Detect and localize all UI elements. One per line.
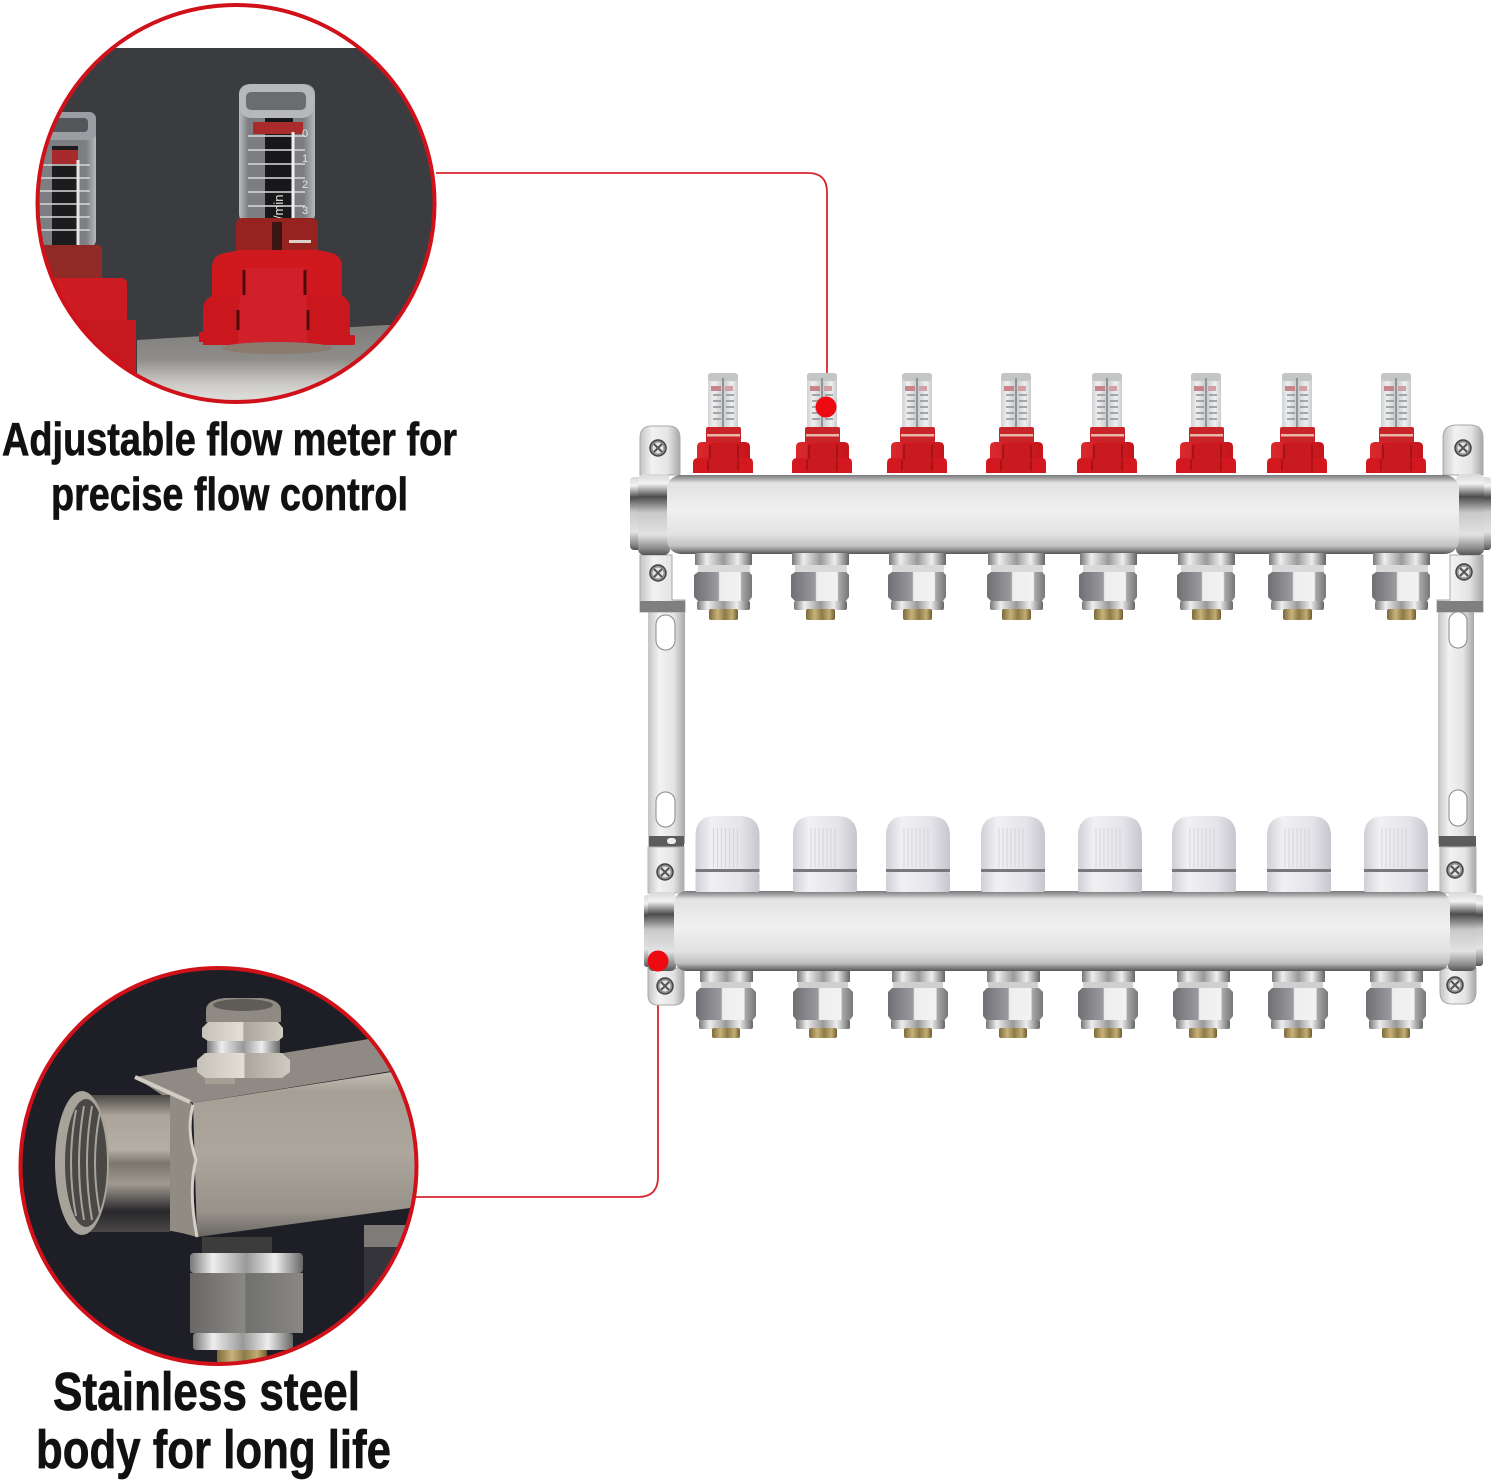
flow meter 7 — [1267, 373, 1327, 473]
flow meter 3 — [887, 373, 947, 473]
manifold body — [135, 1030, 417, 1237]
caption: stainless steel: Stainless steel — [53, 1362, 360, 1422]
flow scale numerals: 0 — [302, 128, 308, 140]
connector line: stainless body — [416, 965, 658, 1197]
top plug fitting — [197, 998, 290, 1084]
bottom right bracket — [1439, 836, 1476, 1004]
flow scale numerals: 1 — [302, 153, 308, 165]
second fitting (background) — [364, 1225, 406, 1297]
connector line: flow meter — [436, 173, 827, 405]
caption: flow meter: Adjustable flow meter for — [2, 413, 457, 465]
manifold product — [630, 373, 1491, 1038]
detail circle: stainless steel close-up — [15, 960, 425, 1370]
marker dot: stainless body — [648, 950, 668, 972]
right mounting strap — [1438, 612, 1474, 844]
bottom left bracket — [648, 835, 684, 1005]
caption: flow meter — [2, 413, 457, 520]
top right bracket — [1437, 425, 1483, 612]
threaded port — [55, 1091, 170, 1235]
upper outlet fittings row — [694, 553, 1430, 620]
flow meter 6 — [1176, 373, 1236, 473]
flow meter 4 — [986, 373, 1046, 473]
flow scale numerals: 2 — [302, 179, 308, 191]
flow meters row — [693, 373, 1426, 473]
bottom header bar — [644, 891, 1483, 971]
white valve caps row — [696, 816, 1428, 892]
flow meter 1 — [693, 373, 753, 473]
flow meter 2 — [792, 373, 852, 473]
left flow meter (partial) — [40, 112, 136, 372]
flow scale numerals: l/min — [271, 195, 286, 222]
top header bar — [630, 474, 1491, 555]
flow scale numerals — [274, 130, 308, 218]
lower outlet fittings row — [696, 971, 1426, 1038]
flow meter 5 — [1077, 373, 1137, 473]
flow meter 8 — [1366, 373, 1426, 473]
caption: stainless steel — [36, 1362, 391, 1480]
left mounting strap — [648, 612, 685, 844]
lower outlet fitting — [190, 1237, 303, 1362]
right flow meter — [199, 84, 355, 354]
caption: stainless steel: body for long life — [36, 1420, 391, 1480]
flow scale numerals: 3 — [302, 205, 308, 217]
top left bracket — [640, 426, 685, 612]
marker dot: flow meter — [816, 396, 836, 418]
caption: flow meter: precise flow control — [51, 468, 408, 520]
detail circle: flow meter close-up — [30, 0, 440, 418]
